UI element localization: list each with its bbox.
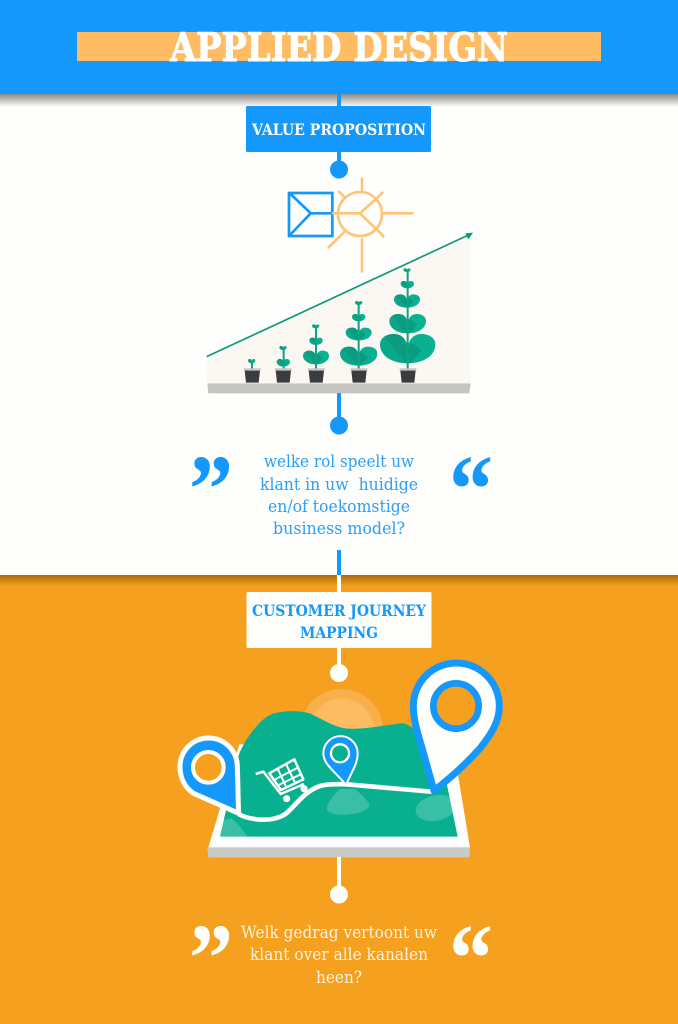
illustration: map with pins — [180, 663, 499, 857]
quote mark: right: “ — [449, 436, 493, 544]
ground shadows — [220, 789, 459, 837]
chart: growing plants — [207, 233, 473, 393]
heading: customer journey mapping — [246, 592, 432, 648]
question text: value proposition: welke rol speelt uw — [264, 452, 414, 472]
connector dot — [330, 664, 348, 682]
panel: white value proposition section — [0, 94, 678, 575]
icon: sun — [329, 178, 412, 272]
question text: customer journey — [241, 923, 437, 988]
growth arrow — [207, 233, 473, 357]
panel: blue header — [0, 0, 678, 94]
green map terrain — [220, 711, 458, 837]
panel: orange customer journey section — [0, 575, 678, 1024]
plant 4 — [340, 301, 377, 383]
plant 3 — [303, 324, 329, 383]
heading: customer journey mapping: MAPPING — [300, 623, 378, 642]
title: APPLIED DESIGN — [169, 25, 508, 71]
pin: left — [180, 738, 239, 813]
question text: value proposition — [260, 452, 418, 539]
route — [238, 784, 432, 820]
question text: value proposition: klant in uw huidige — [260, 475, 418, 495]
floor — [207, 383, 471, 393]
heading: value proposition — [246, 106, 431, 152]
connector with dot — [330, 857, 348, 904]
map board — [207, 744, 470, 857]
icon: envelope — [289, 193, 333, 236]
question text: customer journey: heen? — [316, 968, 362, 988]
quote mark: right: “ — [449, 905, 493, 1013]
question text: customer journey: klant over alle kanalen — [250, 945, 428, 965]
heading: value proposition: VALUE PROPOSITION — [251, 120, 426, 139]
quote mark: left: ” — [189, 905, 233, 1013]
pin: small — [323, 736, 358, 785]
sun behind map — [300, 689, 383, 772]
heading: customer journey mapping: CUSTOMER JOURNEY — [252, 601, 427, 620]
plant 2 — [275, 346, 292, 383]
pin: large — [413, 663, 499, 791]
connector: section transition line — [337, 550, 341, 673]
icon: shopping cart — [256, 759, 306, 801]
question text: customer journey: Welk gedrag vertoont uw — [241, 923, 437, 943]
plant 1 — [244, 359, 261, 383]
quote mark: left: ” — [189, 436, 233, 544]
plant 5 — [380, 268, 435, 383]
question text: value proposition: business model? — [273, 519, 405, 539]
title banner — [77, 25, 601, 71]
chart background — [207, 233, 471, 383]
connector dot — [330, 160, 348, 178]
question text: value proposition: en/of toekomstige — [268, 497, 410, 517]
connector with dot — [330, 393, 348, 434]
connector: top blue line — [337, 94, 341, 170]
